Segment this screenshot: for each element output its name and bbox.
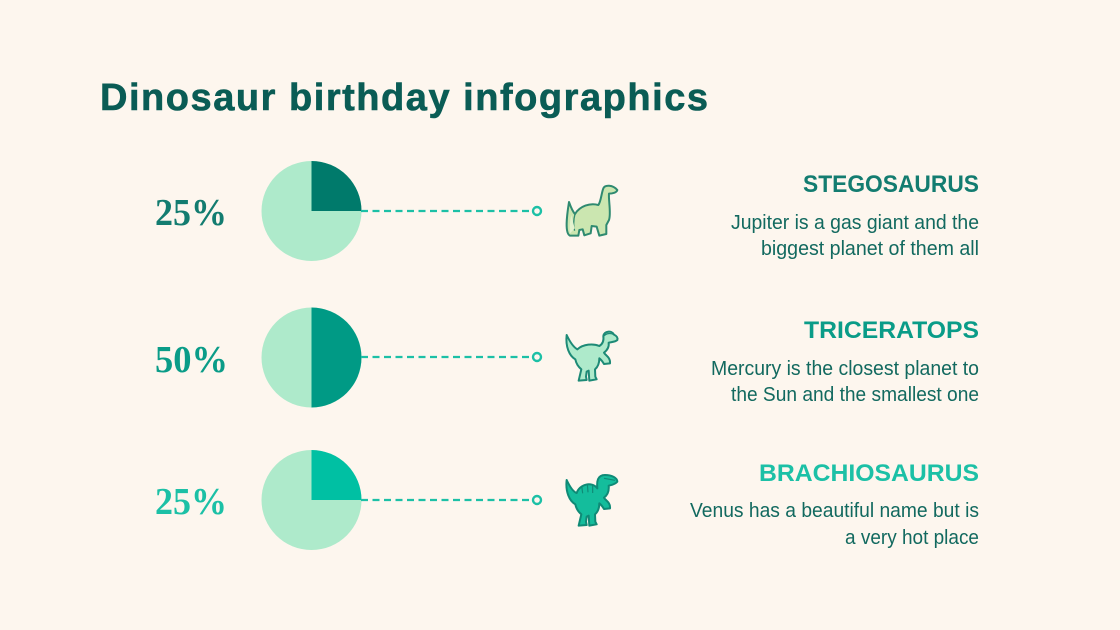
row: stegosaurus	[155, 161, 979, 261]
pie chart: 25 percent dark	[262, 161, 362, 261]
heading: stegosaurus: STEGOSAURUS	[803, 171, 979, 198]
pie chart: 50 percent mid	[262, 308, 362, 408]
row: brachiosaurus	[155, 450, 979, 550]
description: stegosaurus	[731, 212, 979, 260]
heading: brachiosaurus: BRACHIOSAURUS	[759, 460, 979, 487]
percentage 50% mid: 50%	[155, 339, 228, 381]
description: triceratops	[711, 358, 979, 406]
description: triceratops: the Sun and the smallest one	[731, 384, 979, 406]
icon: sail-back dinosaur	[566, 475, 617, 526]
percentage 25% bright: 25%	[155, 481, 227, 523]
heading: triceratops: TRICERATOPS	[804, 317, 979, 344]
description: brachiosaurus: a very hot place	[845, 527, 979, 549]
description: stegosaurus: Jupiter is a gas giant and the	[731, 212, 979, 234]
icon: long-neck dinosaur	[567, 186, 617, 236]
description: brachiosaurus	[690, 500, 979, 549]
connector line	[361, 496, 541, 504]
pie chart: 25 percent bright	[262, 450, 362, 550]
description: brachiosaurus: Venus has a beautiful name but is	[690, 500, 979, 522]
connector line	[361, 207, 541, 215]
title: Dinosaur birthday infographics	[100, 77, 708, 119]
description: stegosaurus: biggest planet of them all	[761, 238, 979, 260]
description: triceratops: Mercury is the closest planet to	[711, 358, 979, 380]
icon: crested dinosaur	[566, 332, 617, 381]
row: triceratops	[155, 308, 979, 408]
connector line	[361, 353, 541, 361]
percentage 25% dark: 25%	[155, 192, 227, 234]
